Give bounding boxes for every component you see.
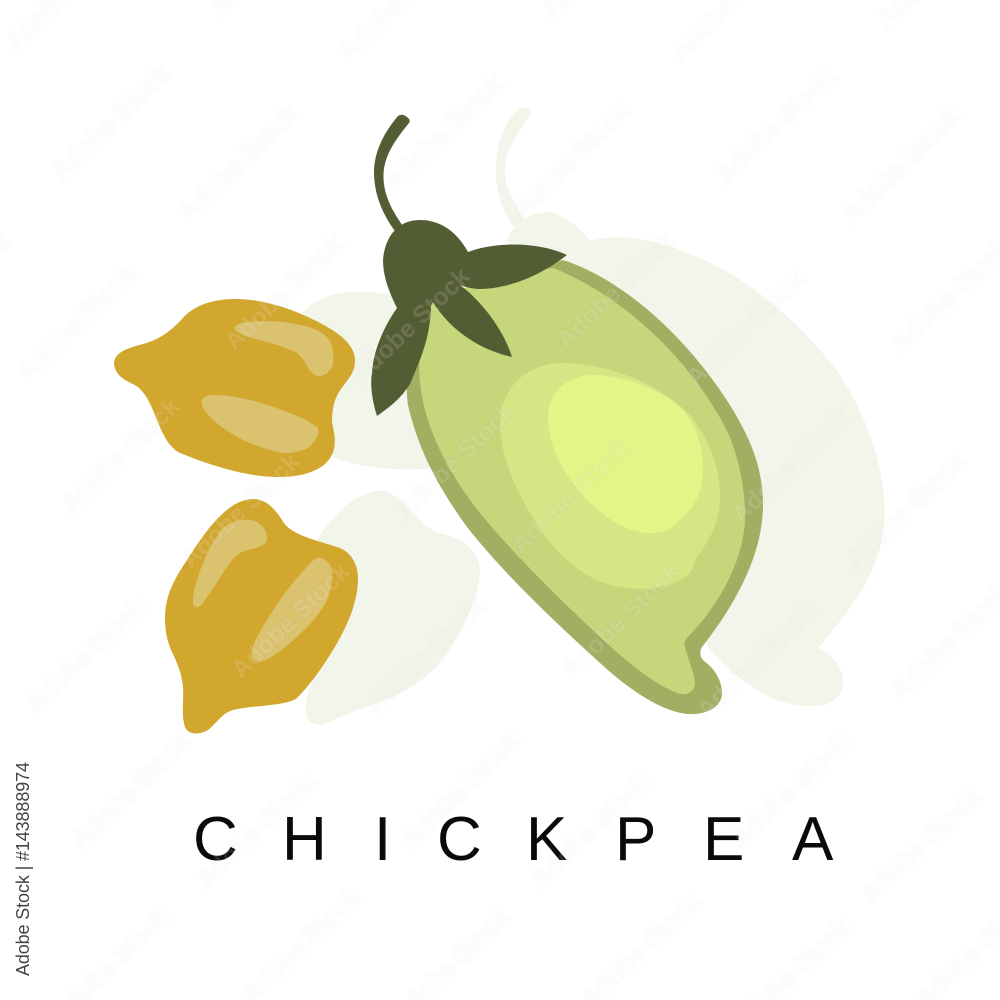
watermark pattern: Adobe Stock [726, 403, 855, 529]
watermark pattern: Adobe Stock [173, 101, 302, 227]
top chickpea seed [114, 299, 355, 477]
highlight [252, 558, 332, 662]
stock number: Adobe Stock | #143888974 [13, 762, 33, 976]
watermark pattern: Adobe Stock [526, 768, 655, 894]
watermark pattern: Adobe Stock [391, 398, 520, 524]
watermark pattern: Adobe Stock [856, 783, 985, 909]
watermark pattern: Adobe Stock [396, 728, 525, 854]
watermark pattern: Adobe Stock [176, 448, 305, 574]
watermark pattern: Adobe Stock [12, 260, 141, 386]
pod inner body [419, 268, 745, 694]
stem [374, 115, 410, 231]
pea centre [548, 375, 703, 533]
bottom seed shadow blob [306, 491, 480, 725]
watermark pattern: Adobe Stock [66, 728, 195, 854]
watermark pattern: Adobe Stock [551, 228, 680, 354]
calyx and leaves [371, 220, 567, 416]
watermark pattern: Adobe Stock [841, 448, 970, 574]
highlight [202, 395, 318, 453]
pod outer rim [407, 260, 763, 714]
pea outer glow [500, 363, 720, 589]
watermark pattern: Adobe Stock [346, 263, 475, 389]
watermark pattern: Adobe Stock [219, 230, 348, 356]
watermark pattern: Adobe Stock [191, 768, 320, 894]
watermark pattern: Adobe Stock [836, 103, 965, 229]
watermark pattern: Adobe Stock [46, 60, 175, 186]
watermark pattern: Adobe Stock [726, 728, 855, 854]
highlight [193, 520, 267, 607]
watermark pattern: Adobe Stock [56, 393, 185, 519]
watermark pattern: Adobe Stock [506, 433, 635, 559]
bottom chickpea seed [165, 499, 358, 733]
watermark pattern: Adobe Stock [556, 558, 685, 684]
watermark pattern: Adobe Stock [681, 266, 810, 392]
title: CHICKPEA [193, 805, 834, 874]
watermark pattern: Adobe Stock [379, 70, 508, 196]
stem and leaves [371, 115, 567, 416]
pod shadow blob [496, 107, 885, 706]
top seed shadow blob [303, 292, 432, 469]
watermark pattern: Adobe Stock [226, 558, 355, 684]
watermark pattern: Adobe Stock [21, 593, 150, 719]
watermark pattern: Adobe Stock [506, 98, 635, 224]
highlight [235, 321, 334, 376]
watermark pattern: Adobe Stock [361, 593, 490, 719]
watermark pattern: Adobe Stock [711, 63, 840, 189]
chickpea pod [407, 260, 763, 714]
watermark pattern: Adobe Stock [691, 598, 820, 724]
